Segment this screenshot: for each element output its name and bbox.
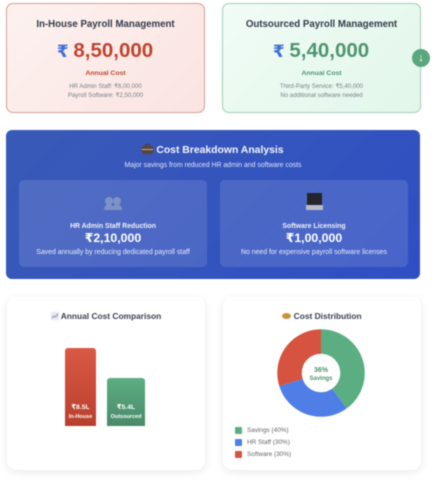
label: donut center: 36% [314,367,328,374]
value: 1,00,000: ₹1,00,000 [286,231,342,245]
bar: outsourced [107,378,145,426]
label: HR admin: HR Admin Staff Reduction [70,223,156,230]
label: outsourced bar: Outsourced [111,414,141,420]
heading: cost breakdown: Cost Breakdown Analysis [156,145,284,156]
value: 5.4L: ₹5.4L [117,404,135,411]
label: in-house bar: In-House [69,414,92,420]
legend: savings: Savings (40%) [247,427,289,434]
panel: annual cost comparison [7,297,205,470]
panel: cost distribution [223,297,421,470]
text: in-house details [68,82,144,99]
text: subtitle: Major savings from reduced HR admin and software costs [125,162,301,169]
panel: HR admin staff reduction [19,180,207,267]
text: outsourced details: No additional software needed [280,92,363,99]
label: annual cost: Annual Cost [85,70,126,77]
icon: down arrow badge: ↓ [418,52,424,64]
text: HR savings note: Saved annually by reducing dedicated payroll staff [36,249,190,256]
icon: people [104,196,122,210]
text: software note: No need for expensive payroll software licenses [241,249,387,256]
text: outsourced details: Third-Party Service: ₹5,40,000 [280,83,363,90]
heading: cost distribution: Cost Distribution [294,311,362,321]
panel: in-house payroll [6,3,205,113]
text: in-house details: HR Admin Staff: ₹6,00,000 [69,83,142,90]
text: outsourced details [280,82,364,99]
legend: HR staff: HR Staff (30%) [247,439,290,446]
legend: software: Software (30%) [247,451,291,458]
panel: cost breakdown analysis [6,130,420,279]
value: 8.5L: ₹8.5L [71,404,90,411]
text: in-house details: Payroll Software: ₹2,50,000 [68,92,143,99]
icon: down arrow badge [412,49,430,67]
heading: outsourced: Outsourced Payroll Management [246,19,397,30]
chart: donut [276,328,366,418]
value: 2,10,000: ₹2,10,000 [85,231,141,245]
cost: in-house: ₹ 8,50,000 [57,39,153,62]
panel: outsourced payroll [222,3,421,113]
icon: laptop [305,192,324,211]
legend: savings [234,426,289,435]
legend: HR staff [234,438,290,447]
panel: software licensing [220,180,408,267]
label: software: Software Licensing [282,223,346,230]
legend: software [234,450,292,459]
label: annual cost: Annual Cost [301,70,342,77]
heading: annual cost comparison: Annual Cost Comparison [61,311,161,321]
heading: in-house: In-House Payroll Management [36,19,175,30]
label: donut center: Savings [309,376,332,382]
bar: in-house [65,348,96,426]
cost: outsourced: ₹ 5,40,000 [273,39,369,62]
label: donut center [309,366,333,382]
